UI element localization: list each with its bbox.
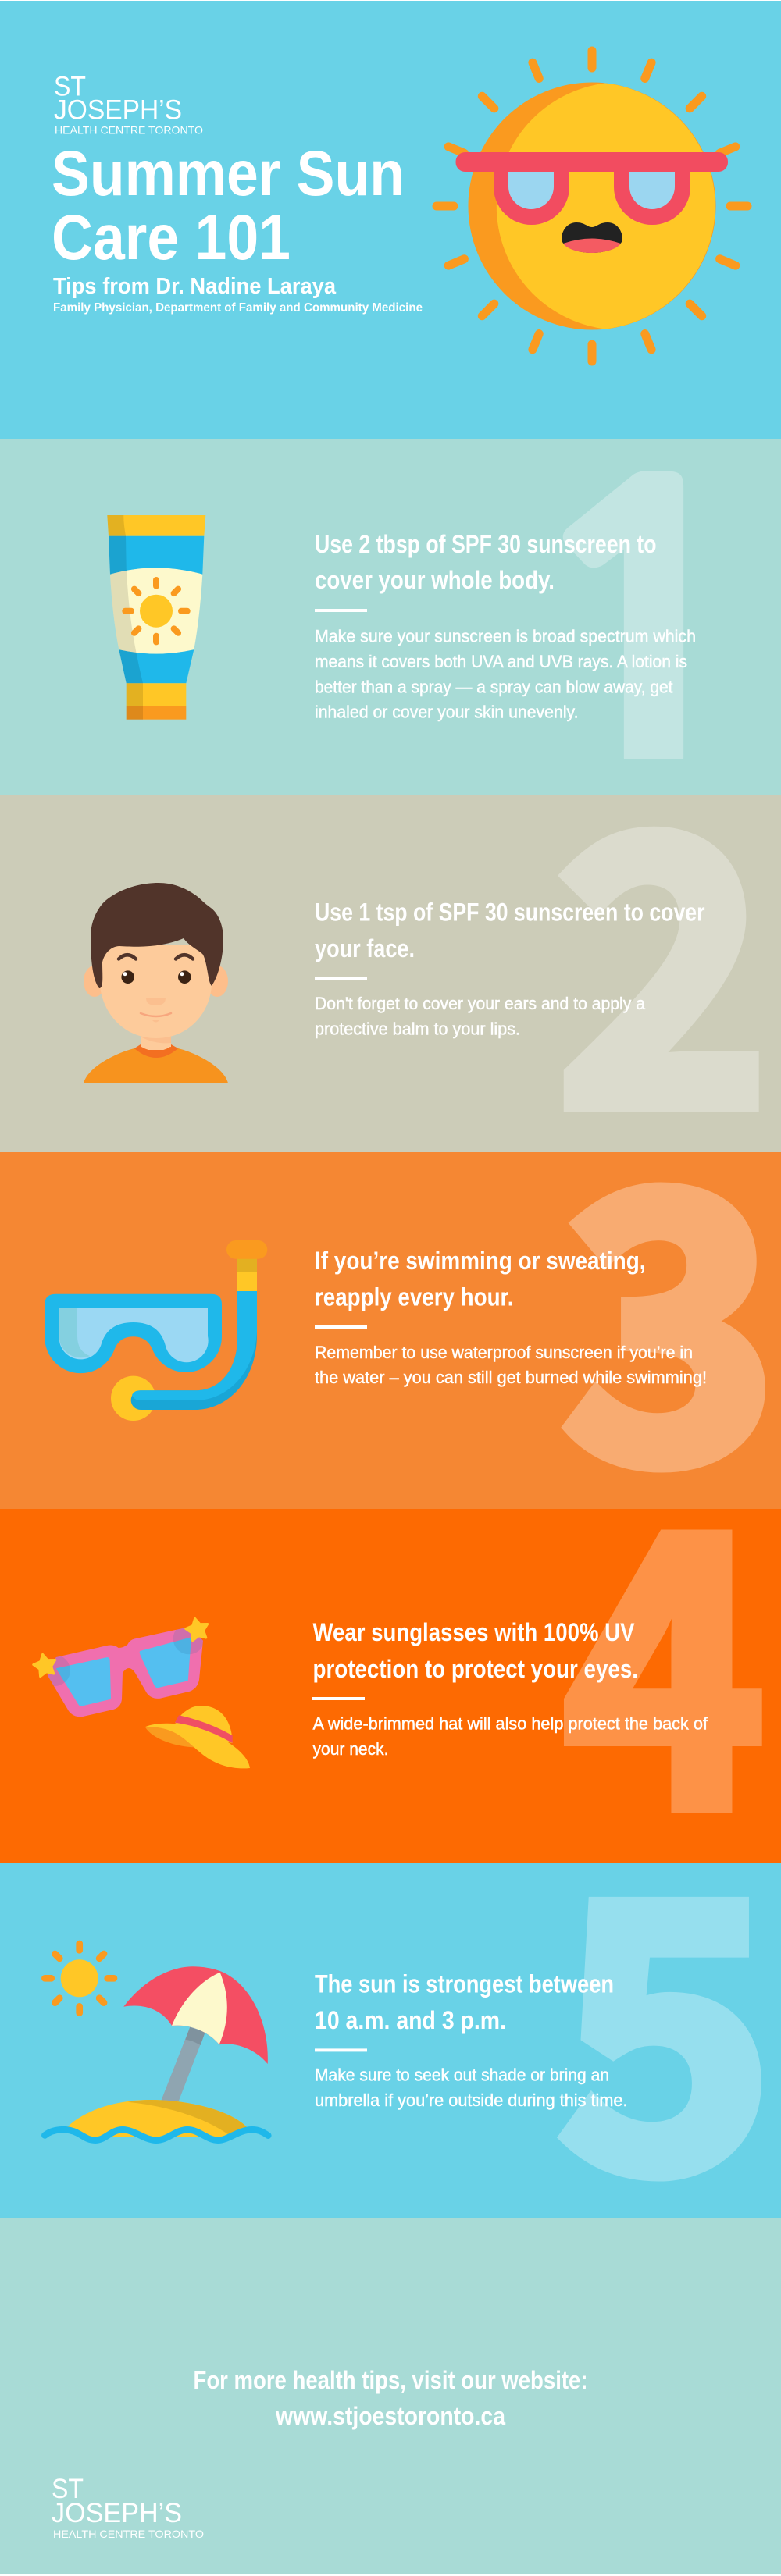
heading: your face. <box>315 934 415 962</box>
divider <box>315 1325 367 1329</box>
divider <box>312 1697 365 1700</box>
heading: The sun is strongest between <box>315 1970 614 1998</box>
panel: step 4 <box>0 1375 781 1912</box>
panel: step 1 <box>0 439 781 817</box>
heading <box>315 1970 614 2034</box>
logo: St Joseph's <box>54 70 203 137</box>
panel: step 3 <box>0 1035 781 1566</box>
sun disc <box>469 83 715 329</box>
body text <box>312 1714 708 1759</box>
body text: Don't forget to cover your ears and to apply a <box>315 994 646 1013</box>
body text <box>315 2065 628 2110</box>
title <box>52 138 405 273</box>
body text: Make sure to seek out shade or bring an <box>315 2065 609 2084</box>
panel: footer <box>0 2218 781 2574</box>
body text: the water – you can still get burned while swimming! <box>315 1368 707 1387</box>
icon: snorkel mask <box>45 1240 267 1421</box>
call to action <box>194 2366 587 2430</box>
mouth <box>562 222 622 253</box>
body text <box>315 1343 707 1387</box>
subtitle: author: Tips from Dr. Nadine Laraya <box>53 274 337 299</box>
logo: St Joseph's <box>52 2473 204 2540</box>
body text: better than a spray — a spray can blow away, get <box>315 678 673 696</box>
logo: St Joseph's: ST <box>54 70 86 101</box>
heading <box>315 1247 645 1311</box>
icon: boy face <box>84 883 228 1083</box>
body text: your neck. <box>312 1739 389 1759</box>
logo: St Joseph's: HEALTH CENTRE TORONTO <box>55 124 203 137</box>
body text: inhaled or cover your skin unevenly. <box>315 703 578 722</box>
heading: protection to protect your eyes. <box>312 1655 638 1683</box>
body text: umbrella if you’re outside during this time. <box>315 2090 628 2110</box>
title: Summer Sun <box>52 138 405 209</box>
heading: cover your whole body. <box>315 566 555 594</box>
logo: St Joseph's: ST <box>52 2473 84 2504</box>
heading <box>315 898 704 962</box>
divider <box>315 2048 367 2051</box>
panel: step 5 <box>0 1745 781 2275</box>
title: Care 101 <box>52 202 291 273</box>
logo: St Joseph's: HEALTH CENTRE TORONTO <box>53 2528 204 2540</box>
heading <box>315 530 656 594</box>
body text: means it covers both UVA and UVB rays. A lotion is <box>315 652 687 671</box>
icon: sun hat <box>145 1706 250 1768</box>
subtitle: role: Family Physician, Department of Family and Community Medicine <box>53 301 423 315</box>
sun rays <box>437 51 747 361</box>
heading: Use 2 tbsp of SPF 30 sunscreen to <box>315 530 656 558</box>
call to action: For more health tips, visit our website: <box>194 2366 587 2394</box>
call to action: www.stjoestoronto.ca <box>275 2402 505 2430</box>
heading: Wear sunglasses with 100% UV <box>312 1618 635 1646</box>
numeral 1: 1 <box>515 447 773 817</box>
body text: Remember to use waterproof sunscreen if you’re in <box>315 1343 693 1362</box>
numeral 2: 2 <box>556 678 769 1211</box>
icon: sun with sunglasses <box>437 51 747 361</box>
heading: Use 1 tsp of SPF 30 sunscreen to cover <box>315 898 704 927</box>
numeral 3: 3 <box>562 1035 778 1566</box>
small sun <box>45 1944 114 2013</box>
body text: protective balm to your lips. <box>315 1019 520 1038</box>
heading: If you’re swimming or sweating, <box>315 1247 645 1275</box>
body text <box>315 994 646 1038</box>
heading <box>312 1618 638 1683</box>
divider <box>315 609 367 612</box>
body text <box>315 627 696 722</box>
icon: sunscreen tube <box>107 515 205 720</box>
numeral 4: 4 <box>564 1375 765 1912</box>
sunglasses <box>456 152 728 225</box>
icon: beach umbrella <box>45 1944 268 2140</box>
panel: header <box>0 1 781 439</box>
logo: St Joseph's: JOSEPH’S <box>54 94 182 125</box>
numeral 5: 5 <box>558 1745 774 2275</box>
body text: A wide-brimmed hat will also help protect the back of <box>312 1714 708 1734</box>
heading: 10 a.m. and 3 p.m. <box>315 2006 506 2034</box>
heading: reapply every hour. <box>315 1283 514 1311</box>
divider <box>315 977 367 980</box>
logo: St Joseph's: JOSEPH’S <box>52 2497 182 2528</box>
icon: sunglasses <box>32 1616 210 1717</box>
panel: step 2 <box>0 678 781 1211</box>
body text: Make sure your sunscreen is broad spectrum which <box>315 627 696 646</box>
